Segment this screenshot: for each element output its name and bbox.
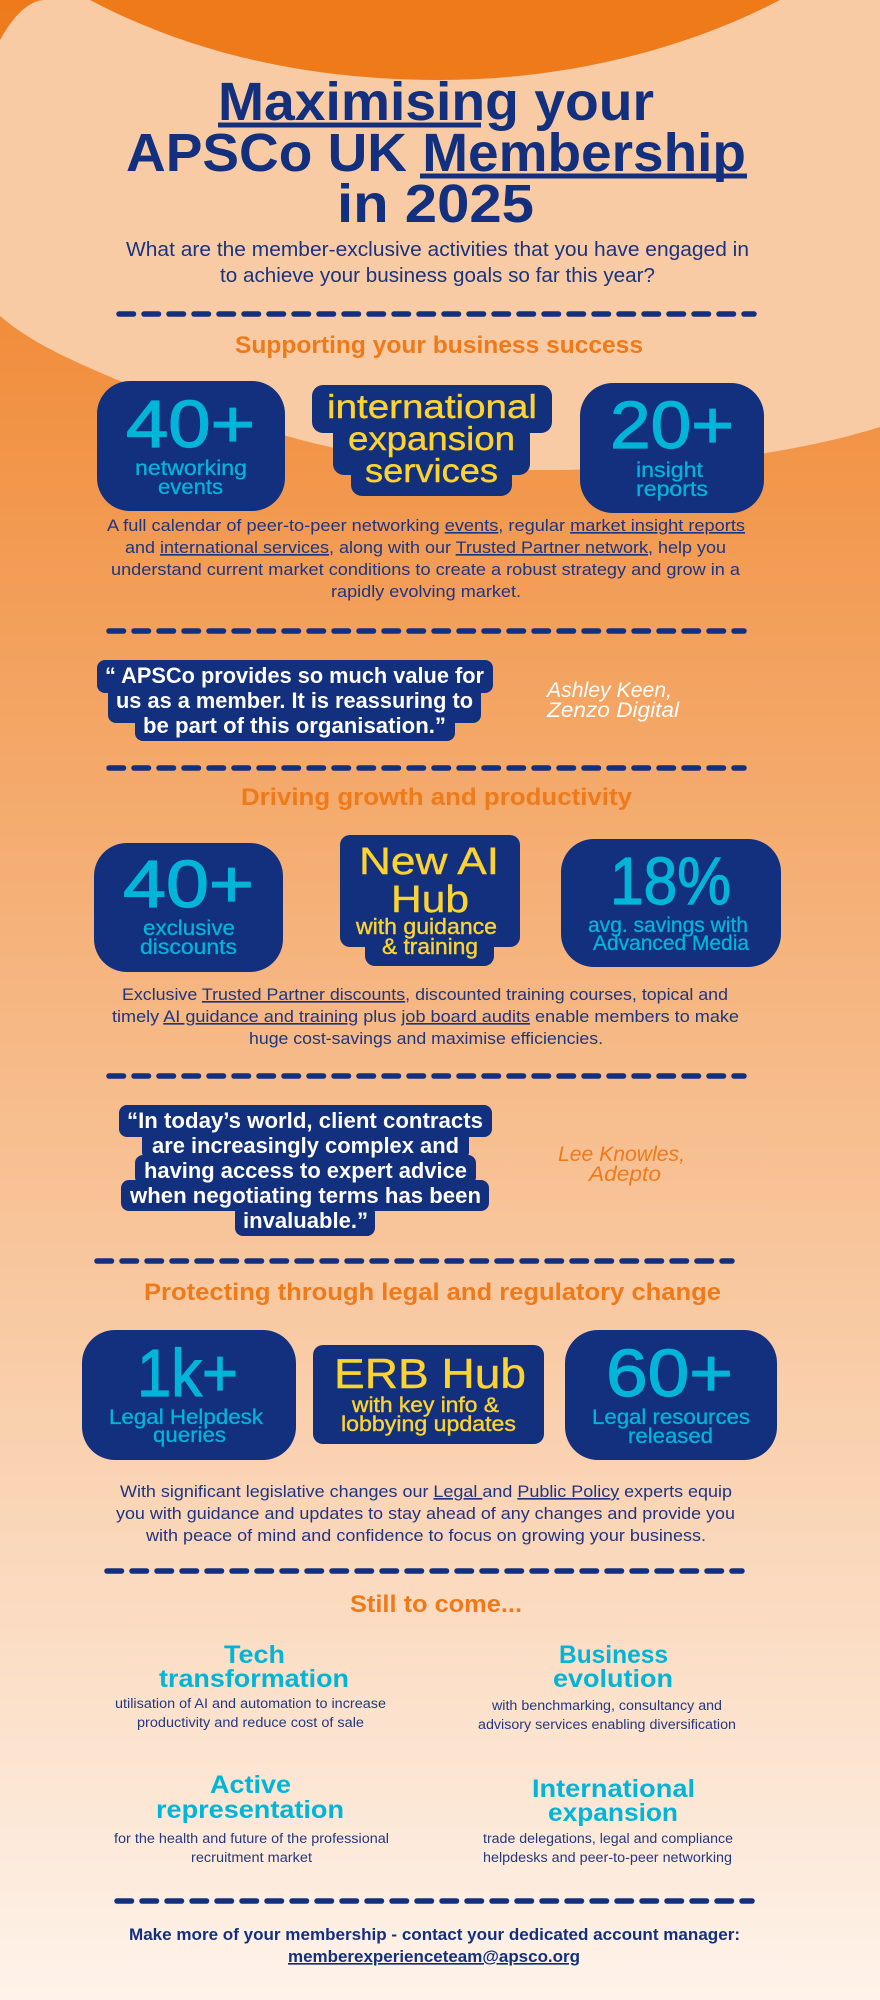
item: business evolution (478, 1641, 736, 1732)
stat: 1k+ queries: Legal Helpdesk (109, 1406, 264, 1429)
stat: ERB Hub (313, 1345, 544, 1444)
paragraph: business success: rapidly evolving market. (331, 583, 521, 601)
stat: 18% savings: Advanced Media (593, 932, 749, 955)
quote: Ashley Keen (97, 660, 493, 741)
stat: 40+ networking events: 40+ (126, 387, 255, 462)
quote: Ashley Keen: “ APSCo provides so much value for (105, 663, 484, 688)
footer call to action: memberexperienceteam@apsco.org (288, 1948, 580, 1966)
item: active representation: recruitment market (191, 1850, 312, 1865)
attribution: Lee Knowles: Adepto (587, 1163, 661, 1186)
footer call to action: Make more of your membership - contact your dedicated account manager: (129, 1926, 740, 1944)
item: international expansion: International (532, 1775, 695, 1803)
background peach wave (0, 0, 880, 470)
paragraph: legal (116, 1483, 735, 1545)
subtitle: to achieve your business goals so far this year? (220, 265, 655, 287)
item: business evolution: advisory services enabling diversification (478, 1717, 736, 1732)
item: tech transformation (115, 1641, 386, 1730)
stat: ERB Hub: ERB Hub (334, 1350, 526, 1397)
item: tech transformation: productivity and reduce cost of sale (137, 1715, 364, 1730)
paragraph: legal: with peace of mind and confidence to focus on growing your business. (145, 1527, 706, 1545)
item: international expansion: expansion (548, 1799, 678, 1827)
stat: 1k+ queries: 1k+ (137, 1336, 238, 1411)
quote: Lee Knowles (119, 1105, 492, 1236)
title (126, 72, 747, 234)
paragraph: growth (112, 986, 739, 1048)
paragraph: legal: With significant legislative changes our Legal and Public Policy experts equip (120, 1483, 732, 1501)
stat: 18% savings: 18% (610, 844, 731, 919)
stat: 40+ exclusive discounts: 40+ (123, 847, 254, 922)
stat: 1k+ queries (82, 1330, 296, 1460)
heading: still to come: Still to come... (350, 1591, 522, 1618)
stat: 40+ networking events: events (158, 476, 223, 499)
stat: 20+ insight reports (580, 383, 764, 513)
quote: Ashley Keen: be part of this organisation.” (143, 713, 446, 738)
attribution: Ashley Keen: Zenzo Digital (546, 699, 680, 722)
stat: 40+ exclusive discounts: discounts (140, 936, 237, 959)
item: business evolution: with benchmarking, consultancy and (491, 1698, 722, 1713)
stat: ERB Hub: lobbying updates (341, 1413, 516, 1436)
stat: New AI Hub: with guidance (355, 914, 497, 939)
paragraph: legal: you with guidance and updates to stay ahead of any changes and provide you (116, 1505, 735, 1523)
item: international expansion: helpdesks and peer-to-peer networking (483, 1850, 732, 1865)
heading: supporting your business success: Supporting your business success (235, 332, 643, 359)
stat: 20+ insight reports: insight (636, 459, 703, 482)
stat: international expansion services: expansion (348, 420, 515, 457)
item: tech transformation: Tech (224, 1641, 285, 1669)
paragraph: business success: understand current market conditions to create a robust strategy and grow in a (111, 561, 741, 579)
quote: Ashley Keen: us as a member. It is reassuring to (116, 688, 473, 713)
subtitle: What are the member-exclusive activities that you have engaged in (126, 239, 749, 261)
title: Maximising your (218, 72, 654, 132)
item: international expansion: trade delegations, legal and compliance (483, 1831, 733, 1846)
footer call to action (129, 1926, 740, 1966)
stat: 60+ resources: 60+ (606, 1336, 733, 1411)
stat: international expansion services (312, 385, 552, 496)
item: active representation: representation (156, 1796, 344, 1824)
stat: 20+ insight reports: 20+ (610, 388, 734, 463)
stat: 18% savings: avg. savings with (588, 914, 748, 937)
item: international expansion (483, 1775, 733, 1865)
subtitle (126, 239, 749, 287)
stat: international expansion services: international (327, 388, 537, 425)
heading: protecting: Protecting through legal and regulatory change (144, 1279, 721, 1306)
stat: 60+ resources (565, 1330, 777, 1460)
stat: New AI Hub: Hub (391, 879, 469, 921)
quote: Lee Knowles: invaluable.” (243, 1208, 368, 1233)
item: business evolution: evolution (553, 1665, 673, 1693)
quote: Lee Knowles: “In today’s world, client contracts (127, 1108, 483, 1133)
quote: Lee Knowles: having access to expert advice (144, 1158, 467, 1183)
paragraph: growth: timely AI guidance and training plus job board audits enable members to make (112, 1008, 739, 1026)
item: active representation: for the health and future of the professional (114, 1831, 389, 1846)
item: active representation (114, 1771, 389, 1865)
paragraph: business success (107, 517, 745, 601)
stat: 40+ networking events: networking (135, 457, 247, 480)
stat: 18% savings (561, 839, 781, 967)
attribution: Lee Knowles: Lee Knowles, (558, 1143, 685, 1166)
paragraph: business success: and international services , along with our Trusted Partner network , help you (125, 539, 726, 557)
stat: 40+ exclusive discounts (94, 843, 283, 972)
item: tech transformation: utilisation of AI and automation to increase (115, 1696, 386, 1711)
paragraph: growth: huge cost-savings and maximise efficiencies. (249, 1030, 603, 1048)
quote: Lee Knowles: are increasingly complex and (152, 1133, 459, 1158)
stat: New AI Hub: & training (382, 934, 478, 959)
title: APSCo UK Membership (126, 123, 746, 183)
stat: ERB Hub: with key info & (351, 1394, 499, 1417)
paragraph: growth: Exclusive Trusted Partner discounts , discounted training courses, topical and (122, 986, 728, 1004)
paragraph: business success: A full calendar of peer-to-peer networking events , regular market insight reports (107, 517, 745, 535)
item: business evolution: Business (559, 1641, 668, 1669)
attribution: Ashley Keen: Ashley Keen, (545, 679, 672, 702)
stat: international expansion services: services (365, 452, 498, 489)
stat: 40+ exclusive discounts: exclusive (143, 917, 235, 940)
top orange arc (90, 0, 780, 80)
stat: New AI Hub (340, 835, 520, 966)
attribution: Ashley Keen (545, 679, 680, 722)
title: in 2025 (337, 174, 534, 234)
item: tech transformation: transformation (159, 1665, 349, 1693)
attribution: Lee Knowles (558, 1143, 685, 1186)
stat: 20+ insight reports: reports (636, 478, 708, 501)
stat: 1k+ queries: queries (153, 1424, 226, 1447)
stat: 60+ resources: Legal resources (592, 1406, 750, 1429)
quote: Lee Knowles: when negotiating terms has been (129, 1183, 481, 1208)
item: active representation: Active (210, 1771, 291, 1799)
heading: driving growth and productivity: Driving growth and productivity (241, 784, 633, 811)
stat: New AI Hub: New AI (359, 841, 499, 883)
stat: 60+ resources: released (628, 1425, 713, 1448)
stat: 40+ networking events (97, 381, 285, 511)
